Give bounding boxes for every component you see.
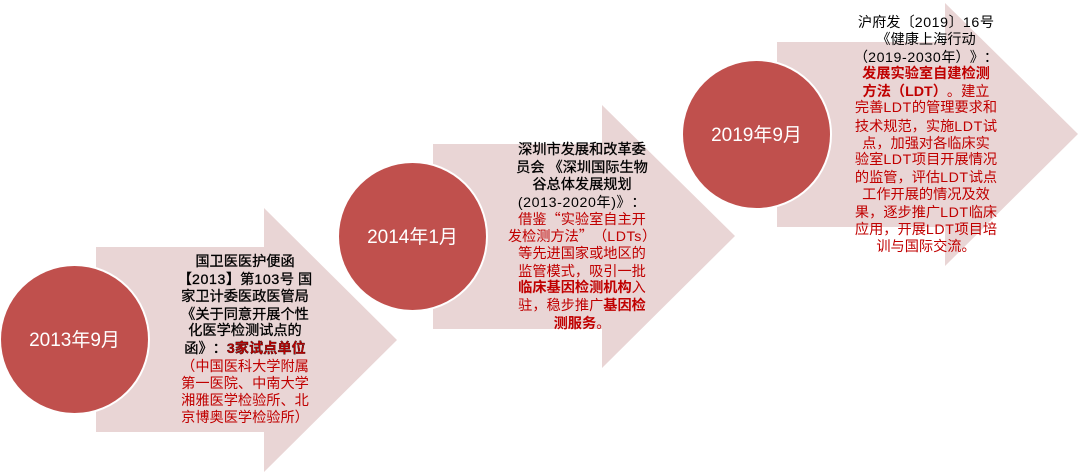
- text block: 2019 policy: 验室LDT项目开展情况: [855, 152, 997, 168]
- text block: 2013 policy: 【2013】第103号 国: [178, 269, 312, 289]
- text block: 2019 policy: 完善LDT的管理要求和: [855, 100, 997, 116]
- text block: 2019 policy: 点，加强对各临床实: [862, 133, 990, 153]
- text block: 2019 policy: 工作开展的情况及效: [862, 187, 990, 203]
- text block: 2013 policy: 国卫医医护便函: [195, 254, 295, 270]
- text block: 2014 policy: (2013-2020年)》：: [518, 192, 646, 212]
- text block: 2019 policy: 发展实验室自建检测: [862, 66, 990, 82]
- text block: 2014 policy: 监管模式，吸引一批: [518, 261, 646, 281]
- text block: 2019 policy: 训与国际交流。: [876, 236, 976, 256]
- text block: 2014 policy: 测服务。: [554, 313, 610, 333]
- text block: 2013 policy: 家卫计委医政医管局: [181, 289, 309, 305]
- arrow: step one: [96, 208, 397, 472]
- text block: 2019 policy: 的监管，评估LDT试点: [855, 167, 997, 187]
- circle: 2019年9月: [683, 61, 830, 208]
- text block: 2013 policy: [178, 254, 312, 427]
- arrow: step two: [433, 105, 735, 368]
- text block: 2014 policy: [508, 142, 656, 333]
- text block: 2013 policy: 《关于同意开展个性: [181, 304, 309, 324]
- text block: 2013 policy: 第一医院、中南大学: [181, 373, 309, 393]
- circle: 2013年9月: 2013年9月: [29, 330, 120, 351]
- text block: 2013 policy: 京博奥医学检验所）: [181, 407, 309, 427]
- text block: 2013 policy: 化医学检测试点的: [188, 323, 302, 339]
- text block: 2014 policy: 临床基因检测机构入: [518, 280, 646, 296]
- text block: 2019 policy: 《健康上海行动: [876, 29, 976, 49]
- text block: 2019 policy: （2019-2030年）》：: [854, 47, 998, 67]
- circle: 2013年9月: [1, 266, 148, 413]
- text block: 2014 policy: 谷总体发展规划: [532, 177, 632, 193]
- text block: 2013 policy: 湘雅医学检验所、北: [181, 390, 309, 410]
- text block: 2019 policy: 方法（LDT）。建立: [862, 81, 989, 101]
- circle: 2014年1月: 2014年1月: [367, 227, 458, 248]
- text block: 2019 policy: [854, 12, 998, 256]
- circle: 2014年1月: [339, 163, 486, 310]
- text block: 2014 policy: 深圳市发展和改革委: [518, 142, 646, 158]
- text block: 2014 policy: 等先进国家或地区的: [518, 246, 646, 262]
- text block: 2019 policy: 沪府发〔2019〕16号: [858, 12, 994, 32]
- text block: 2019 policy: 应用，开展LDT项目培: [855, 219, 997, 239]
- circle: 2019年9月: 2019年9月: [711, 125, 802, 146]
- text block: 2014 policy: 借鉴“实验室自主开: [518, 209, 646, 229]
- text block: 2013 policy: 函》：3家试点单位: [184, 338, 306, 358]
- text block: 2014 policy: 员会 《深圳国际生物: [516, 157, 648, 177]
- text block: 2013 policy: （中国医科大学附属: [181, 356, 309, 376]
- text block: 2014 policy: 驻，稳步推广基因检: [518, 295, 646, 315]
- arrow: step three: [777, 3, 1078, 266]
- text block: 2019 policy: 果，逐步推广LDT临床: [855, 202, 997, 222]
- text block: 2019 policy: 技术规范，实施LDT试: [855, 116, 997, 136]
- text block: 2014 policy: 发检测方法”（LDTs）: [508, 226, 656, 246]
